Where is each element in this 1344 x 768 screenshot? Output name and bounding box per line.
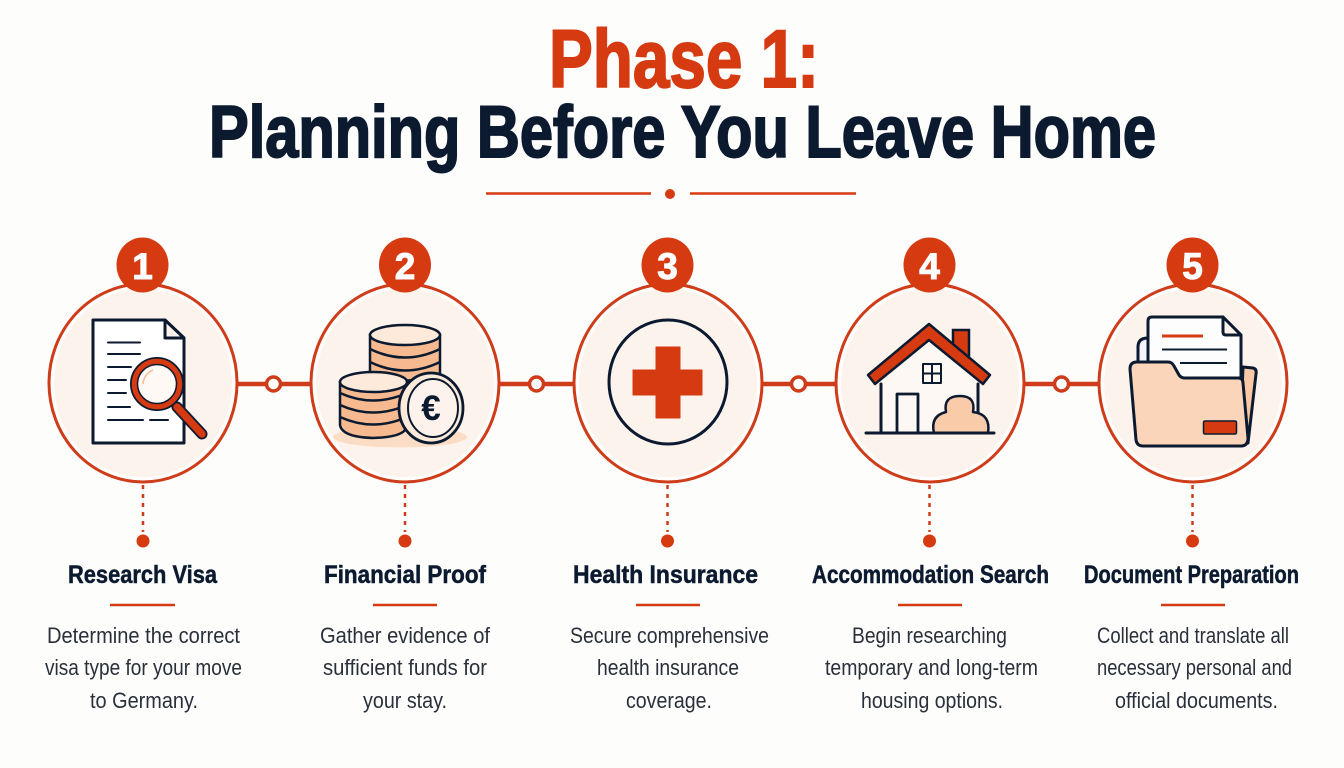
text block: health insurance	[570, 623, 769, 713]
icon: document with magnifier	[93, 320, 202, 443]
text block: document preparation: necessary personal and	[1097, 655, 1292, 680]
title divider	[486, 189, 856, 199]
divider rule 3	[636, 604, 700, 606]
number badge 5	[1166, 238, 1218, 292]
marker dot 5	[1186, 534, 1199, 548]
text block: financial proof: sufficient funds for	[323, 655, 487, 680]
connector 3 to 4	[762, 377, 836, 391]
divider rule 1	[110, 604, 175, 606]
icon: folder with documents	[1130, 317, 1256, 446]
connector dotted line 1	[142, 485, 144, 532]
number badge 2: 2	[395, 246, 415, 287]
connector dotted line 5	[1191, 485, 1194, 532]
connector dotted line 4	[928, 485, 931, 532]
text block: financial proof: Gather evidence of	[320, 623, 491, 648]
heading: accommodation search: Accommodation Search	[812, 561, 1049, 589]
divider rule 2	[373, 604, 437, 606]
number badge 5: 5	[1182, 246, 1203, 287]
connector 2 to 3	[498, 377, 574, 391]
panel: step 1 research visa	[45, 238, 242, 713]
text block: document preparation	[1097, 623, 1292, 713]
text block: health insurance: health insurance	[597, 655, 739, 680]
text block: accommodation search: temporary and long-term	[825, 655, 1038, 680]
text block: accommodation search: Begin researching	[852, 623, 1007, 648]
divider rule 5	[1161, 604, 1225, 606]
text block: research visa	[45, 623, 242, 713]
text block: accommodation search	[825, 623, 1038, 713]
text block: document preparation: official documents.	[1115, 688, 1278, 713]
connector dotted line 2	[404, 485, 406, 532]
divider rule 4	[898, 604, 962, 606]
number badge 4: 4	[919, 246, 940, 287]
panel: step 3 health insurance	[570, 238, 769, 713]
text block: health insurance: Secure comprehensive	[570, 623, 769, 648]
number badge 1	[116, 238, 168, 292]
panel: step 5 document preparation	[1084, 238, 1299, 713]
icon: coins with euro	[333, 325, 467, 448]
text block: document preparation: Collect and translate all	[1097, 623, 1289, 648]
marker dot 3	[661, 534, 674, 548]
connector dotted line 3	[666, 485, 669, 532]
heading: financial proof: Financial Proof	[324, 561, 487, 589]
text block: financial proof: your stay.	[363, 688, 447, 713]
title	[209, 14, 1156, 173]
text block: financial proof	[320, 623, 491, 713]
connector 4 to 5	[1023, 377, 1099, 391]
text block: accommodation search: housing options.	[861, 688, 1003, 713]
marker dot 2	[398, 534, 412, 548]
number badge 2	[379, 238, 431, 292]
text block: health insurance: coverage.	[626, 688, 712, 713]
number badge 3: 3	[657, 246, 678, 287]
text block: research visa: to Germany.	[90, 688, 198, 713]
text block: research visa: visa type for your move	[45, 655, 242, 680]
connector 1 to 2	[237, 377, 311, 391]
marker dot 4	[923, 534, 936, 548]
icon: medical cross	[609, 320, 727, 444]
number badge 4	[904, 238, 956, 292]
marker dot 1	[136, 534, 150, 548]
panel: step 4 accommodation search	[812, 238, 1049, 713]
title: Phase 1:	[549, 14, 819, 105]
icon: house	[866, 324, 994, 433]
text block: research visa: Determine the correct	[47, 623, 240, 648]
heading: research visa: Research Visa	[68, 561, 218, 589]
panel: step 2 financial proof	[311, 238, 499, 713]
number badge 3	[642, 238, 694, 292]
title: Planning Before You Leave Home	[209, 92, 1156, 173]
icon: coins with euro: €	[421, 389, 441, 428]
number badge 1: 1	[132, 246, 153, 287]
heading: health insurance: Health Insurance	[573, 561, 758, 589]
